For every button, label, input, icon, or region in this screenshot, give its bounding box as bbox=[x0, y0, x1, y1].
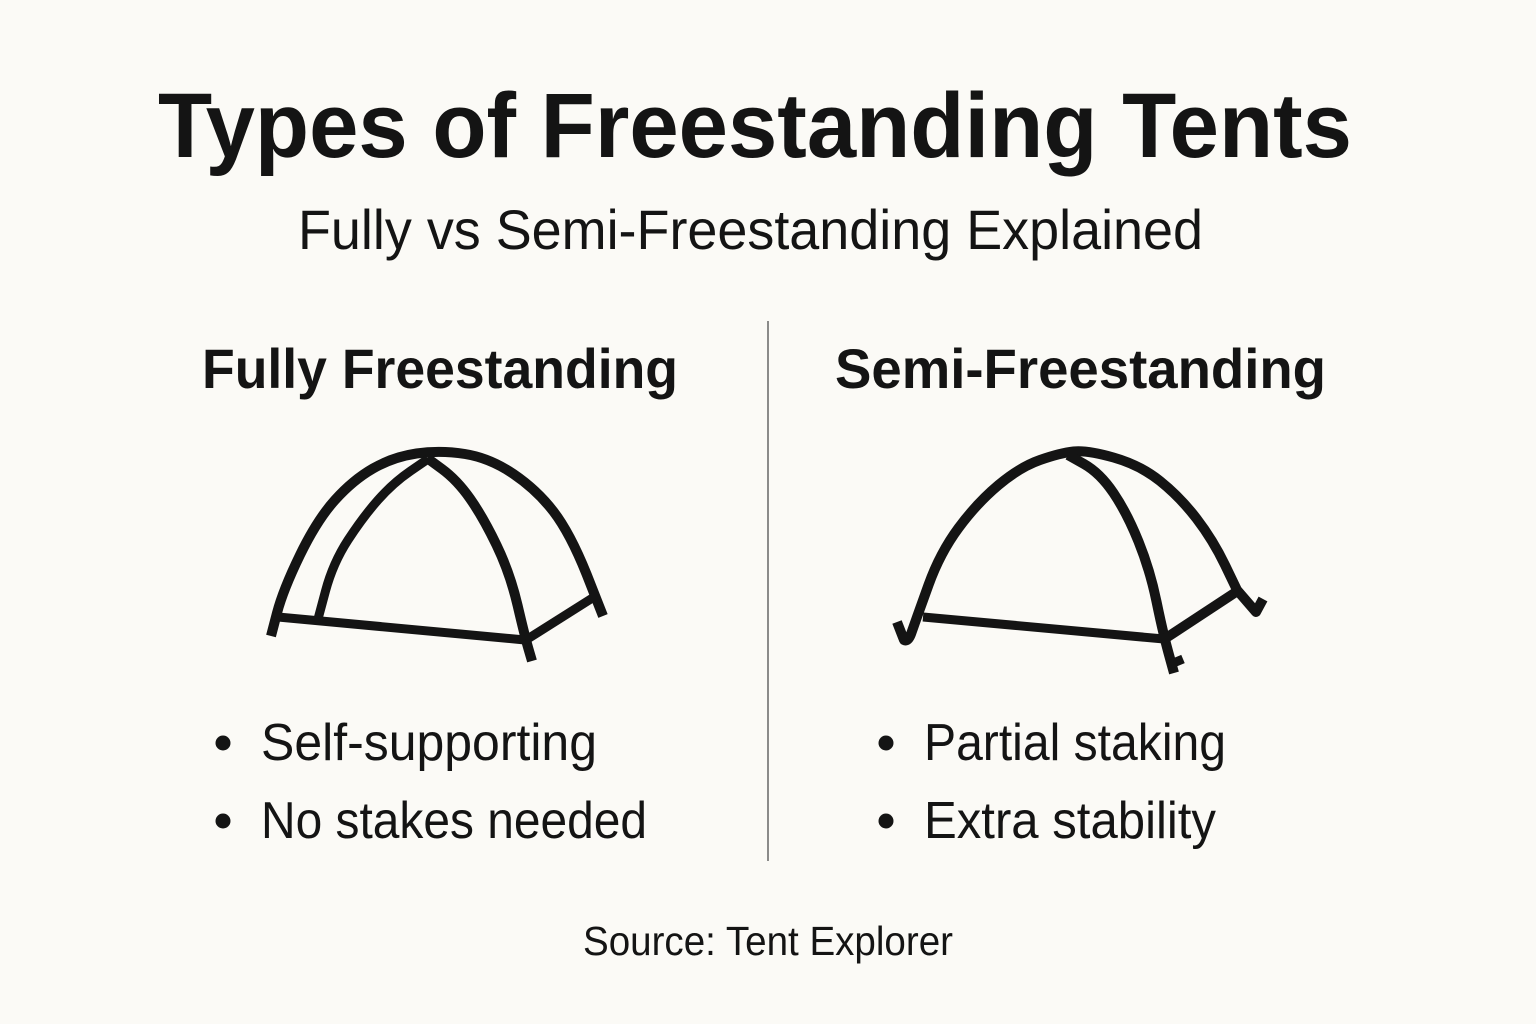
panel: fully freestanding bbox=[202, 337, 678, 850]
panel: semi-freestanding bbox=[835, 337, 1326, 850]
bullet list: semi-freestanding: Extra stability bbox=[924, 792, 1216, 850]
title: Types of Freestanding Tents bbox=[158, 75, 1352, 177]
bullet list: fully freestanding: Self-supporting bbox=[261, 714, 597, 772]
icon: fully freestanding tent bbox=[271, 452, 603, 661]
subtitle: Fully vs Semi-Freestanding Explained bbox=[298, 198, 1203, 261]
column divider bbox=[767, 321, 769, 861]
bullet list: fully freestanding: No stakes needed bbox=[261, 792, 647, 850]
icon: semi-freestanding tent bbox=[897, 451, 1263, 673]
heading: fully freestanding: Fully Freestanding bbox=[202, 337, 678, 400]
source note: Source: Tent Explorer bbox=[583, 918, 953, 964]
heading: semi-freestanding: Semi-Freestanding bbox=[835, 337, 1326, 400]
bullet list: semi-freestanding bbox=[878, 714, 1226, 850]
bullet list: fully freestanding bbox=[216, 714, 647, 850]
bullet list: semi-freestanding: Partial staking bbox=[924, 714, 1226, 772]
